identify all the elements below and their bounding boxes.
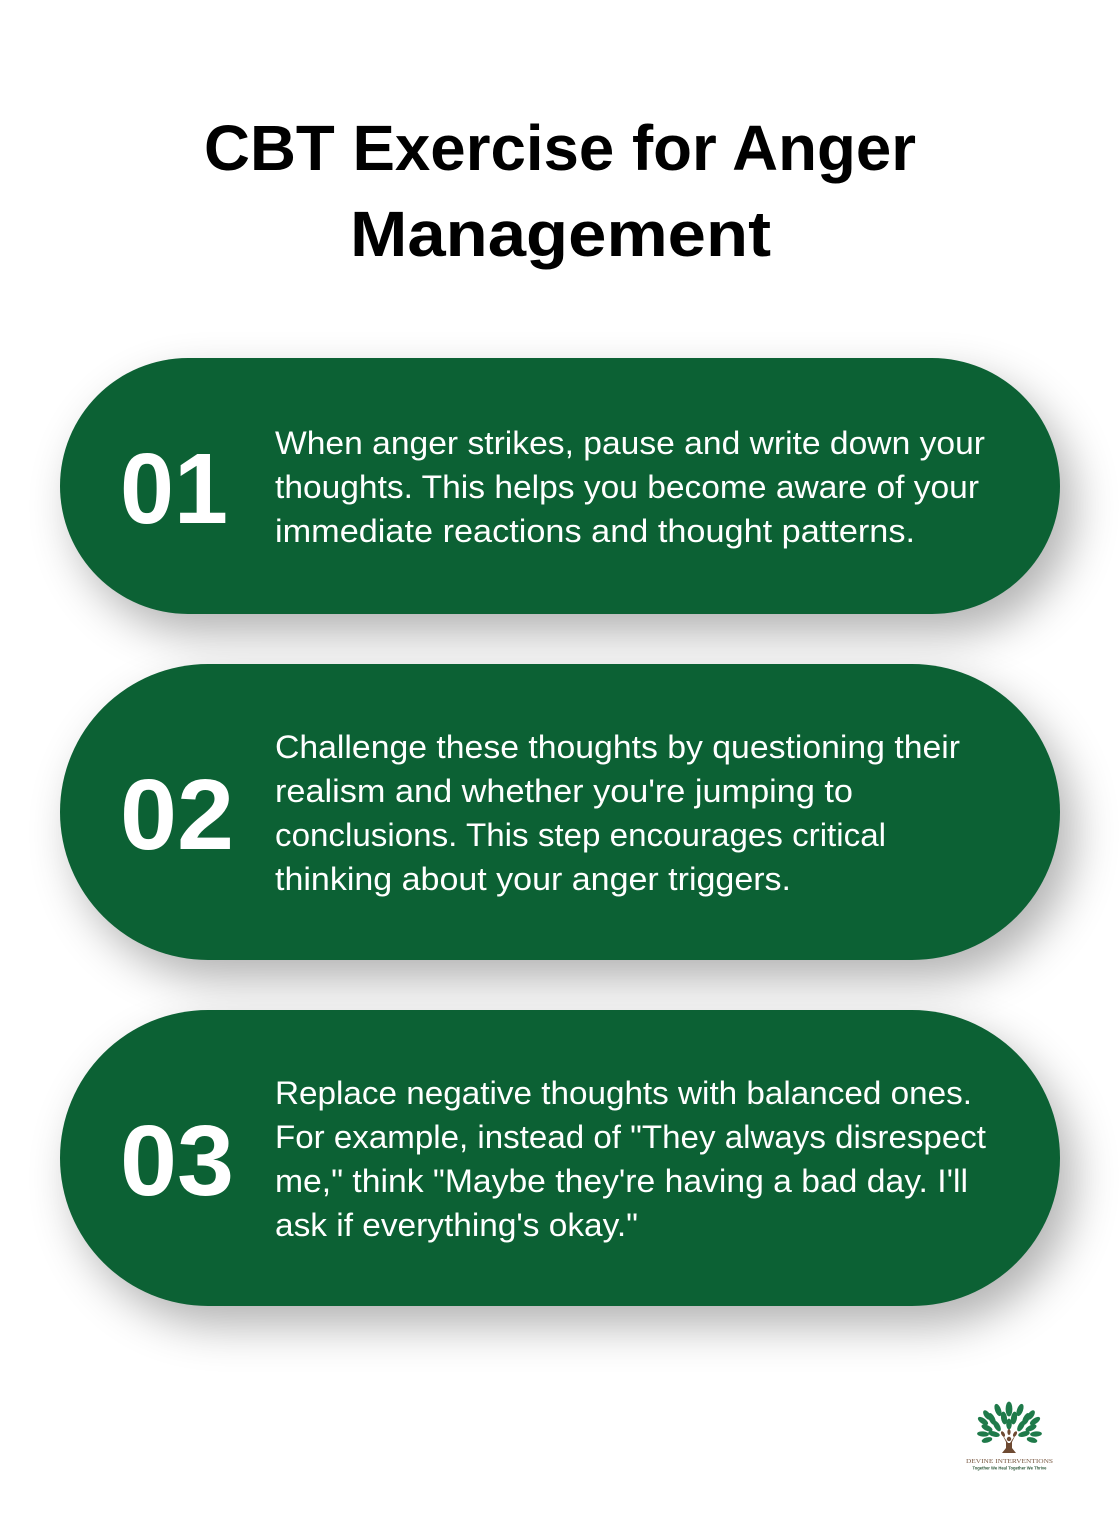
step 03 text: Replace negative thoughts with balanced ones. [275, 1075, 972, 1111]
step 01 text: When anger strikes, pause and write down your [275, 425, 985, 461]
step 02 text: thinking about your anger triggers. [275, 861, 791, 897]
logo tagline: Together We Heal Together We Thrive [972, 1466, 1047, 1470]
step number 03: 03 [120, 1105, 234, 1217]
step 03 text [275, 1075, 986, 1243]
step number 01: 01 [120, 433, 228, 545]
step 03 text: For example, instead of "They always disrespect [275, 1119, 986, 1155]
step 01 text: immediate reactions and thought patterns. [275, 513, 915, 549]
icon: tree leaves [977, 1402, 1042, 1443]
step 02 text: realism and whether you're jumping to [275, 773, 853, 809]
title: Management [350, 198, 771, 270]
title [204, 112, 916, 270]
step 02 text [275, 729, 960, 897]
step 01 text: thoughts. This helps you become aware of your [275, 469, 979, 505]
panel: step 01 [60, 358, 1060, 614]
panel: step 02 [60, 664, 1060, 960]
step 03 text: me," think "Maybe they're having a bad day. I'll [275, 1163, 968, 1199]
step 02 text: conclusions. This step encourages critical [275, 817, 886, 853]
logo name: DEVINE INTERVENTIONS [966, 1458, 1054, 1465]
icon: figure trunk [1000, 1429, 1018, 1453]
step 02 text: Challenge these thoughts by questioning their [275, 729, 960, 765]
step number 02: 02 [120, 759, 234, 871]
step 01 text [275, 425, 985, 549]
logo: Devine Interventions tree [966, 1402, 1054, 1470]
title: CBT Exercise for Anger [204, 112, 916, 184]
panel: step 03 [60, 1010, 1060, 1306]
step 03 text: ask if everything's okay." [275, 1207, 638, 1243]
